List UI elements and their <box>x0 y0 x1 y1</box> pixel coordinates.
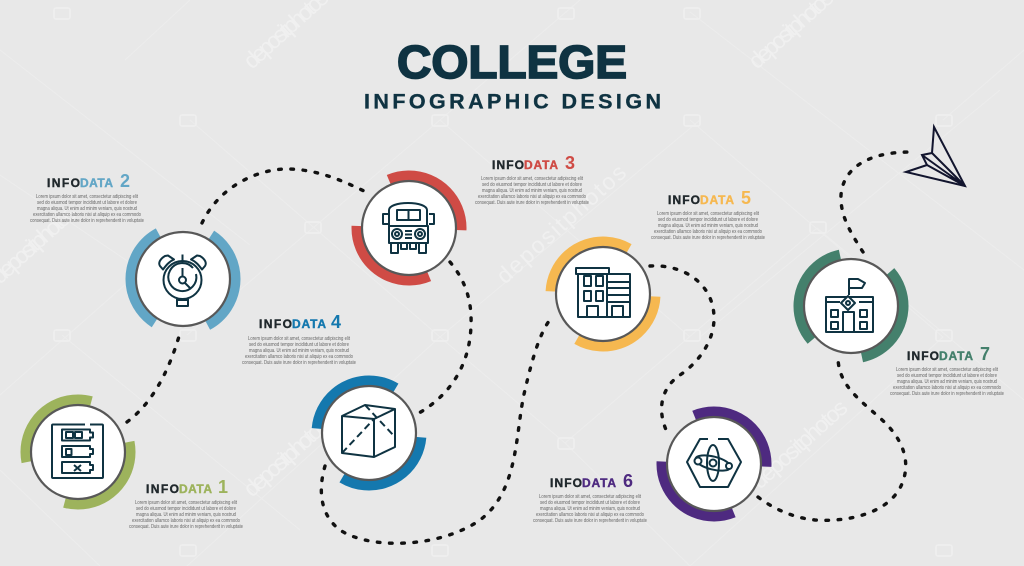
info block 7: DATA <box>939 349 973 363</box>
info block 3: exercitation ullamco laboris nisi ut aliquip ex ea commodo <box>478 194 586 200</box>
info block 2: exercitation ullamco laboris nisi ut aliquip ex ea commodo <box>33 212 141 218</box>
info block 5 <box>651 188 765 241</box>
info block 2: Lorem ipsum dolor sit amet, consectetur adipiscing elit <box>36 194 139 200</box>
node 6: atom hexagon <box>646 396 782 532</box>
info block 3: sed do eiusmod tempor incididunt ut labore et dolore <box>482 182 582 188</box>
info block 7: sed do eiusmod tempor incididunt ut labore et dolore <box>897 373 997 379</box>
info block 5: magna aliqua. Ut enim ad minim veniam, quis nostrud <box>658 223 758 229</box>
info block 5: DATA <box>700 193 734 207</box>
info block 6: consequat. Duis aute irure dolor in reprehenderit in voluptate <box>533 518 647 524</box>
info block 1: INFO <box>146 482 179 496</box>
info block 1: consequat. Duis aute irure dolor in reprehenderit in voluptate <box>129 524 243 530</box>
title <box>364 36 661 114</box>
info block 2: consequat. Duis aute irure dolor in reprehenderit in voluptate <box>30 218 144 224</box>
info block 1: Lorem ipsum dolor sit amet, consectetur adipiscing elit <box>135 500 238 506</box>
info block 2 <box>30 171 144 224</box>
info block 5: Lorem ipsum dolor sit amet, consectetur adipiscing elit <box>657 211 760 217</box>
node 2: alarm clock <box>111 207 255 351</box>
subtitle: INFOGRAPHIC DESIGN <box>364 90 661 114</box>
info block 1: magna aliqua. Ut enim ad minim veniam, quis nostrud <box>136 512 236 518</box>
info block 2: DATA <box>80 176 113 190</box>
info block 1: DATA <box>179 482 212 496</box>
text: depositphotos <box>238 412 333 502</box>
info block 7 <box>890 344 1004 397</box>
title: COLLEGE <box>397 36 627 88</box>
info block 3: Lorem ipsum dolor sit amet, consectetur adipiscing elit <box>481 176 584 182</box>
info block 7: consequat. Duis aute irure dolor in reprehenderit in voluptate <box>890 391 1004 397</box>
info block 5: INFO <box>668 193 700 207</box>
info block 6: DATA <box>582 476 616 490</box>
info block 1 <box>129 477 243 530</box>
info block 7: INFO <box>907 349 939 363</box>
connector: step 1 to 2 <box>127 333 180 422</box>
info block 1: sed do eiusmod tempor incididunt ut labore et dolore <box>136 506 236 512</box>
info block 2: INFO <box>47 176 80 190</box>
info block 2: sed do eiusmod tempor incididunt ut labore et dolore <box>37 200 137 206</box>
info block 6: Lorem ipsum dolor sit amet, consectetur adipiscing elit <box>539 494 642 500</box>
info block 6: sed do eiusmod tempor incididunt ut labore et dolore <box>540 500 640 506</box>
info block 6: INFO <box>550 476 582 490</box>
node 7: school <box>778 233 924 379</box>
info block 6: exercitation ullamco laboris nisi ut aliquip ex ea commodo <box>536 512 644 518</box>
connector: step 6 to 7 <box>758 357 906 520</box>
info block 1: exercitation ullamco laboris nisi ut aliquip ex ea commodo <box>132 518 240 524</box>
icon: paper plane <box>906 127 965 186</box>
info block 4: INFO <box>259 317 292 331</box>
info block 3: DATA <box>524 158 558 172</box>
info block 5: sed do eiusmod tempor incididunt ut labore et dolore <box>658 217 758 223</box>
connector: step 5 to 6 <box>650 266 714 436</box>
info block 3: INFO <box>492 158 524 172</box>
connector: step 2 to 3 <box>202 169 364 223</box>
node 3: school bus <box>341 160 477 296</box>
info block 4: DATA <box>292 317 326 331</box>
info block 3: 3 <box>565 153 575 173</box>
info block 6: 6 <box>623 471 633 491</box>
node 1: battery <box>17 391 139 513</box>
info block 7: magna aliqua. Ut enim ad minim veniam, quis nostrud <box>897 379 997 385</box>
info block 5: 5 <box>741 188 751 208</box>
node 5: office building <box>548 239 658 349</box>
info block 1: 1 <box>218 477 228 497</box>
info block 6: magna aliqua. Ut enim ad minim veniam, quis nostrud <box>540 506 640 512</box>
info block 3: magna aliqua. Ut enim ad minim veniam, quis nostrud <box>482 188 582 194</box>
icon: cube <box>342 405 395 457</box>
info block 2: magna aliqua. Ut enim ad minim veniam, quis nostrud <box>37 206 137 212</box>
connector: step 7 to plane <box>841 152 911 252</box>
icon: office building <box>576 268 630 317</box>
info block 2: 2 <box>120 171 130 191</box>
info block 4: Lorem ipsum dolor sit amet, consectetur adipiscing elit <box>248 336 351 342</box>
info block 3: consequat. Duis aute irure dolor in reprehenderit in voluptate <box>475 200 589 206</box>
info block 4: exercitation ullamco laboris nisi ut aliquip ex ea commodo <box>245 354 353 360</box>
node 4: box <box>313 377 425 489</box>
info block 4: consequat. Duis aute irure dolor in reprehenderit in voluptate <box>242 360 356 366</box>
info block 6 <box>533 471 647 524</box>
info block 7: 7 <box>980 344 990 364</box>
icon: battery list <box>52 424 103 478</box>
info block 3 <box>475 153 589 206</box>
icon: school building <box>826 279 873 332</box>
text: depositphotos <box>746 394 853 494</box>
connector: step 3 to 4 <box>419 262 471 413</box>
icon: hexagon atom <box>687 439 741 487</box>
info block 4: sed do eiusmod tempor incididunt ut labore et dolore <box>249 342 349 348</box>
icon: alarm clock <box>159 254 206 306</box>
text: depositphotos <box>491 159 631 289</box>
icon: school bus <box>383 203 434 253</box>
info block 4: 4 <box>331 312 341 332</box>
info block 4: magna aliqua. Ut enim ad minim veniam, quis nostrud <box>249 348 349 354</box>
info block 5: exercitation ullamco laboris nisi ut aliquip ex ea commodo <box>654 229 762 235</box>
info block 5: consequat. Duis aute irure dolor in reprehenderit in voluptate <box>651 235 765 241</box>
info block 4 <box>242 312 356 366</box>
info block 7: exercitation ullamco laboris nisi ut aliquip ex ea commodo <box>893 385 1001 391</box>
connector: step 4 to 5 <box>321 316 553 543</box>
info block 7: Lorem ipsum dolor sit amet, consectetur adipiscing elit <box>896 367 999 373</box>
